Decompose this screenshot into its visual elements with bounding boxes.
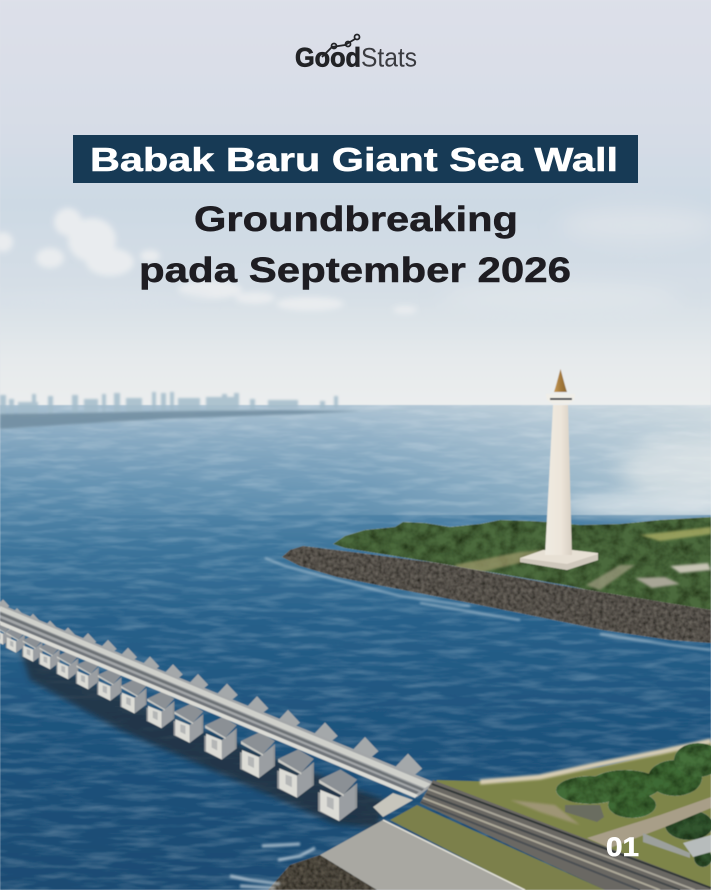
island greenery <box>333 517 711 612</box>
sandy coastline <box>480 741 711 782</box>
title banner: Babak Baru Giant Sea Wall <box>90 141 618 178</box>
rock revetment <box>268 855 377 890</box>
island with monument <box>265 369 711 650</box>
deck <box>0 604 436 798</box>
concrete apron <box>320 820 525 890</box>
shore buildings <box>565 805 711 858</box>
surf along breakwater <box>265 558 711 650</box>
logo: Stats <box>361 42 417 72</box>
subtitle: Groundbreaking <box>194 200 518 239</box>
giant sea wall <box>0 599 436 828</box>
logo <box>295 34 417 72</box>
clouds <box>0 207 711 314</box>
page number: 01 <box>606 832 639 862</box>
road <box>587 797 711 848</box>
logo: Good <box>295 42 361 72</box>
rear blocks <box>0 599 422 777</box>
front piers <box>0 621 357 821</box>
dark foundation rocks <box>20 650 385 828</box>
distant city skyline <box>0 392 470 429</box>
railway tracks <box>420 780 711 890</box>
background sky <box>0 0 711 410</box>
title banner <box>73 135 638 183</box>
breakwater rocks <box>282 546 711 643</box>
dirt yard <box>510 800 580 825</box>
shore land with railway <box>230 741 711 890</box>
monument <box>520 369 598 570</box>
gate block <box>373 793 413 817</box>
subtitle: pada September 2026 <box>139 251 571 290</box>
icon: trend line <box>322 34 360 57</box>
island lawn and paths <box>454 527 711 590</box>
surf at revetment <box>230 844 315 888</box>
grassy shore <box>420 742 711 890</box>
subtitle <box>139 200 571 290</box>
sea <box>0 405 711 890</box>
embankment grass <box>390 805 605 890</box>
trees <box>556 743 711 890</box>
